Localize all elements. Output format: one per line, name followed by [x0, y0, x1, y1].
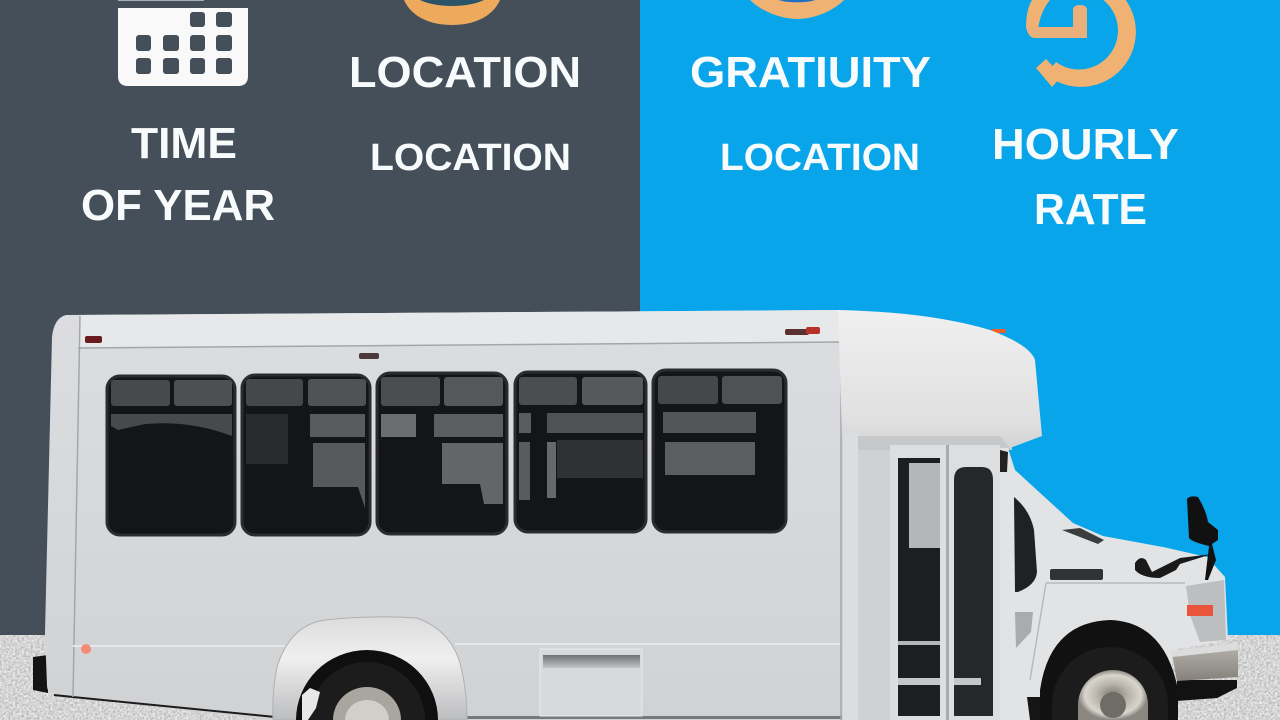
- marker lights: [81, 327, 1006, 654]
- label: location: LOCATION: [370, 137, 571, 179]
- side mirror: [1187, 496, 1218, 580]
- small mirror and arm: [1135, 554, 1212, 578]
- door column highlight: [843, 433, 858, 720]
- door glass right: [954, 467, 993, 716]
- cab vent panel: [1015, 612, 1033, 648]
- rear wheel: [296, 650, 438, 720]
- roof strip: [78, 310, 840, 348]
- front bumper: [1170, 643, 1238, 701]
- windshield pillar shadow: [1000, 450, 1008, 472]
- headlight: [1186, 580, 1226, 642]
- icon: gratuity coin ring: [750, 0, 844, 19]
- bus: [33, 310, 1238, 720]
- window 4: [515, 372, 646, 532]
- door step: [1027, 697, 1040, 720]
- label: time of year: [81, 119, 275, 230]
- label: time of year: OF YEAR: [81, 181, 275, 230]
- bus rear and side body: [45, 310, 1000, 720]
- window 3: [377, 373, 507, 534]
- door frame column: [842, 436, 890, 720]
- icon: calendar: [118, 0, 248, 86]
- underside shadow line: [54, 695, 275, 717]
- label: hourly rate: [992, 120, 1179, 234]
- cab seam and hood crease: [1030, 583, 1185, 680]
- window 2: [242, 375, 370, 535]
- cabin roof cap: [838, 310, 1042, 448]
- cab side window: [1014, 497, 1037, 592]
- label: location right: LOCATION: [720, 137, 920, 179]
- body trim lines: [73, 312, 841, 720]
- door header below cap: [842, 430, 1012, 450]
- panel: dark left background: [0, 0, 640, 720]
- ground: [0, 635, 1280, 720]
- storage hatch: [540, 649, 642, 716]
- rear wheel arch: [273, 617, 467, 720]
- heading: location: LOCATION: [349, 48, 581, 97]
- passenger doors: [890, 445, 1000, 720]
- label: hourly rate: RATE: [1034, 185, 1147, 234]
- window 5: [653, 370, 786, 532]
- wiper and hood vent: [1050, 528, 1104, 580]
- label: time of year: TIME: [131, 119, 237, 168]
- rear bumper: [33, 655, 48, 693]
- panel: blue right background: [640, 0, 1280, 720]
- heading: gratuity: GRATIUITY: [690, 48, 931, 97]
- label: hourly rate: HOURLY: [992, 120, 1179, 169]
- cab body: [1000, 448, 1228, 720]
- icon: location pin base ring: [404, 0, 500, 25]
- window 1: [107, 376, 235, 535]
- icon: clock: [1026, 0, 1136, 87]
- lower skirt line: [465, 716, 845, 719]
- front wheel arch: [1040, 620, 1178, 720]
- front wheel: [1052, 647, 1168, 720]
- door glass left: [898, 458, 940, 716]
